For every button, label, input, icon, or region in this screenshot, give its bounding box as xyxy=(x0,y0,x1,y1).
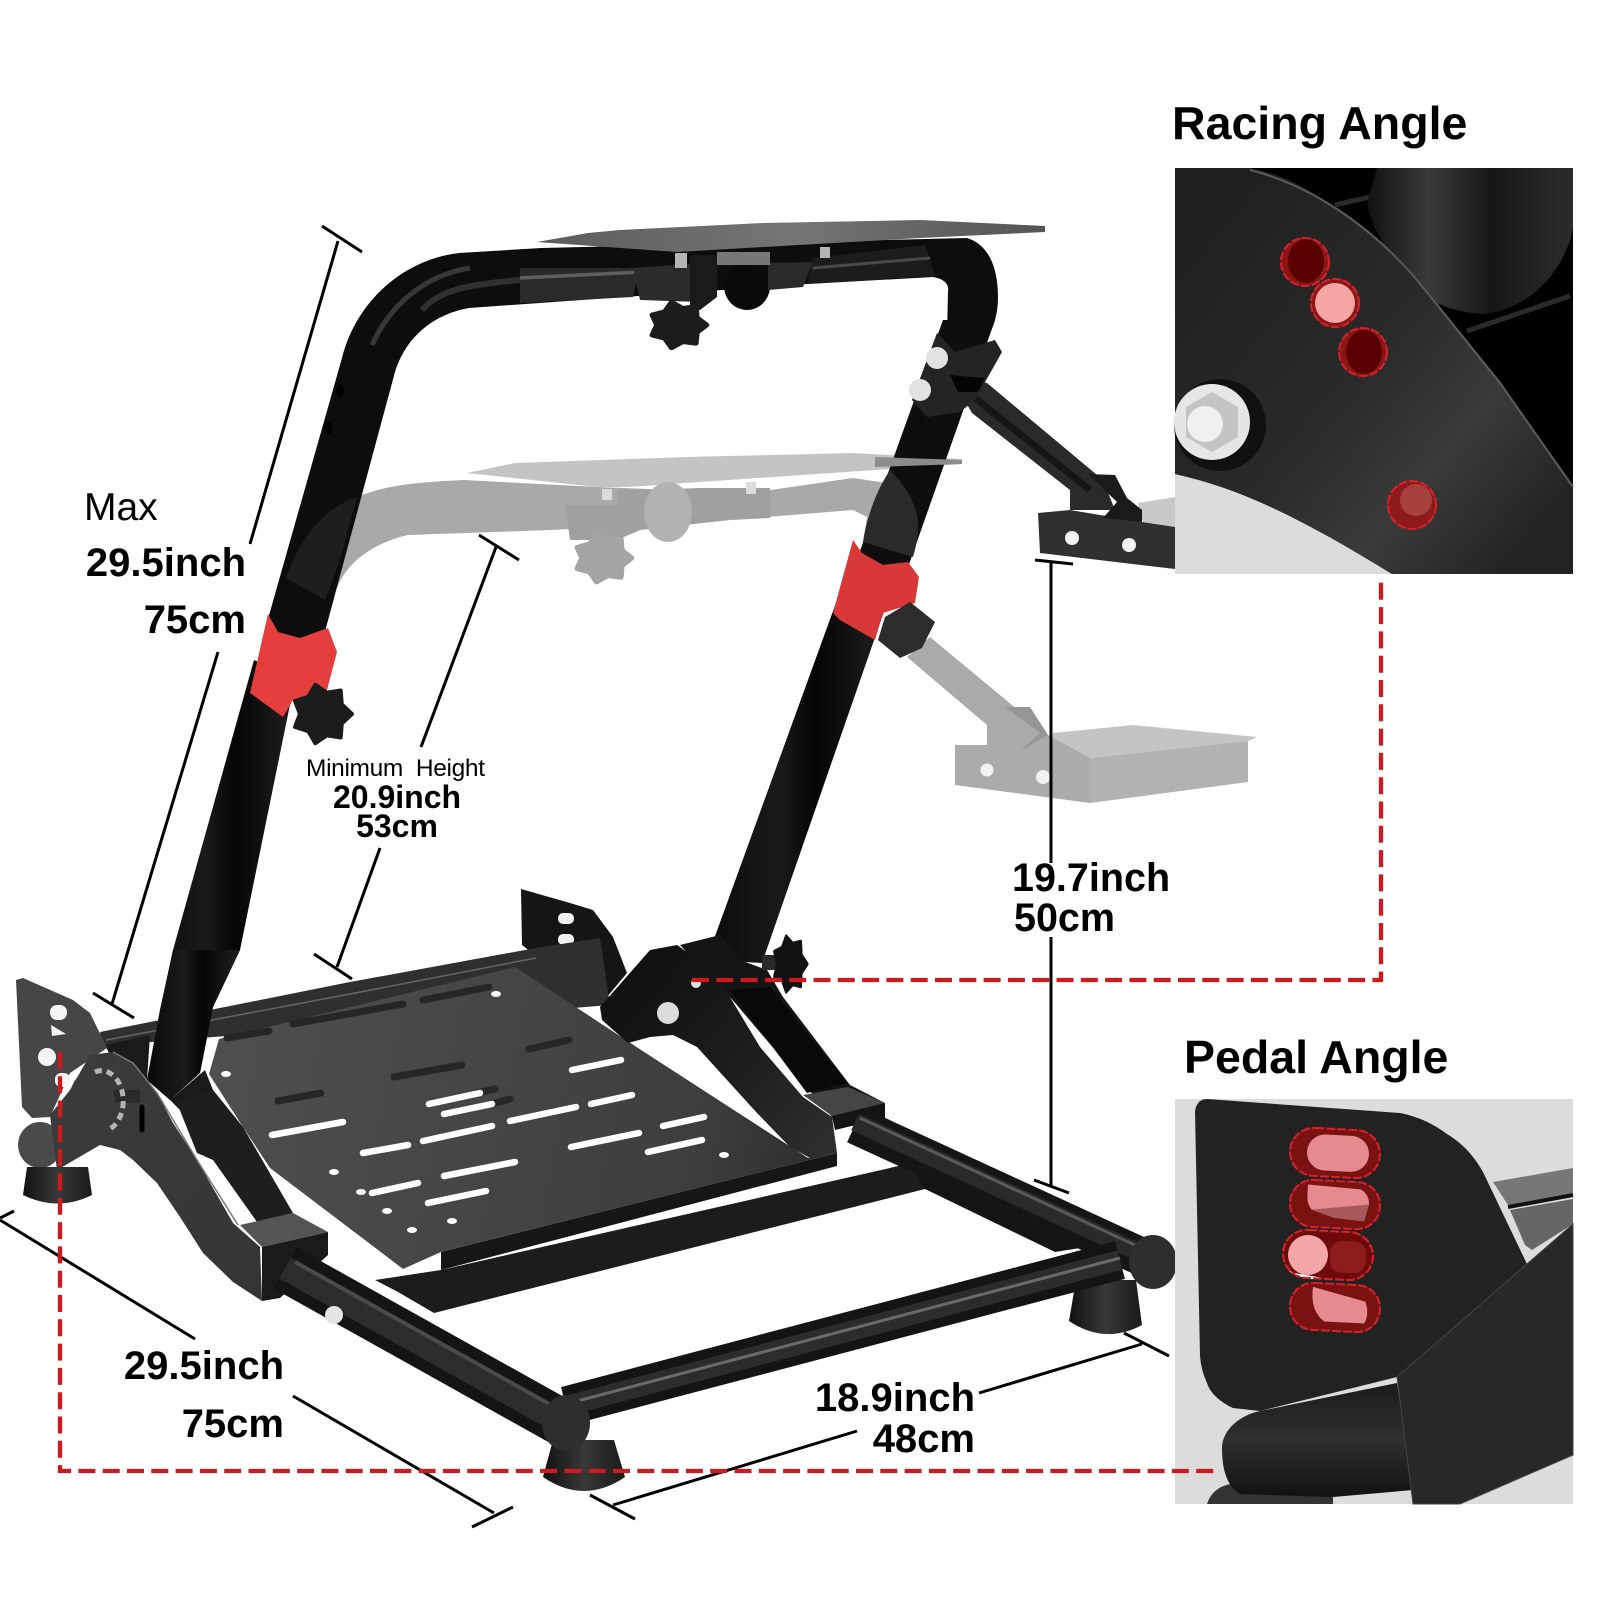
ghost clamp xyxy=(565,488,770,540)
ghost wedge xyxy=(1005,707,1048,751)
ghost arc over left post xyxy=(286,497,357,600)
ghost knob xyxy=(577,534,632,582)
right lower post xyxy=(708,578,888,963)
upper right clamp xyxy=(912,333,1002,417)
left block front xyxy=(262,1232,328,1301)
right block top xyxy=(803,1087,885,1116)
label: minimum height: Minimum Height xyxy=(306,755,485,782)
panel background xyxy=(1175,1099,1573,1504)
left collar knob xyxy=(295,685,352,743)
background struts xyxy=(1335,190,1570,331)
red dashed connector: pedal angle xyxy=(60,1052,1220,1471)
top knob xyxy=(652,302,706,348)
tube section left of clamp xyxy=(520,268,640,303)
pedal bracket front xyxy=(1038,510,1175,569)
ghost plate band across right post xyxy=(875,457,962,467)
clamp grey bar xyxy=(717,252,770,265)
right foot xyxy=(1069,1280,1142,1334)
ghost pedal block top xyxy=(1053,725,1257,758)
right rear inner member xyxy=(680,935,885,1130)
panel: racing angle xyxy=(1174,168,1573,574)
label: max height xyxy=(84,486,246,642)
clamp collars under top plate xyxy=(633,262,717,302)
main stand xyxy=(147,220,1175,1100)
highlighted hole pivot xyxy=(1388,481,1436,529)
ghost bracket front xyxy=(955,735,1090,803)
label: minimum height xyxy=(306,755,485,844)
clamp bolts xyxy=(909,347,948,401)
silver pads xyxy=(675,247,830,268)
side plate xyxy=(1195,1099,1527,1411)
label: arm height xyxy=(1012,856,1170,940)
red collar left xyxy=(250,614,337,717)
ghost clamp roller xyxy=(644,482,692,542)
ghost plate xyxy=(467,453,962,487)
label: base width: 48cm xyxy=(873,1417,975,1461)
ghost: lowered wheel mount position xyxy=(286,453,1257,803)
light background corner xyxy=(1175,474,1392,574)
right rear side plate xyxy=(521,889,627,1003)
label: base width: 18.9inch xyxy=(815,1376,975,1420)
label: minimum height: 20.9inch xyxy=(333,779,461,815)
foot xyxy=(1207,1484,1333,1504)
front triangle plate xyxy=(1397,1224,1573,1504)
right long tube xyxy=(855,1118,1153,1262)
left lower post xyxy=(147,660,295,1100)
right bracket xyxy=(600,945,837,1158)
left long tube xyxy=(285,1262,566,1425)
left base knob xyxy=(69,1070,140,1134)
black side plate xyxy=(1175,168,1573,574)
label: arm height: 19.7inch xyxy=(1012,856,1170,900)
label: base length xyxy=(124,1344,284,1446)
dimension lines xyxy=(0,226,1169,1527)
tube bolt xyxy=(325,1306,343,1324)
ghost arm xyxy=(907,637,1048,760)
label: minimum height: 53cm xyxy=(356,808,438,844)
red dashed connector: racing angle xyxy=(692,578,1381,980)
slot 4 xyxy=(1289,1282,1381,1333)
tube end caps xyxy=(542,1395,590,1451)
front crossbar xyxy=(375,1160,925,1313)
red collar right xyxy=(833,540,919,640)
slot 2 xyxy=(1289,1179,1381,1230)
upper arm beam xyxy=(950,375,1115,510)
plate front flange xyxy=(441,1153,837,1270)
panel: pedal angle xyxy=(1175,1099,1573,1504)
right bracket bolts xyxy=(657,1002,679,1024)
label: base length: 29.5inch xyxy=(124,1344,284,1388)
ghost block side xyxy=(1090,741,1248,803)
front foot xyxy=(543,1440,625,1491)
left ball joint xyxy=(18,1122,62,1168)
arm wedge xyxy=(1088,474,1142,522)
clamp roller xyxy=(724,262,770,310)
label: arm height: 50cm xyxy=(1014,896,1115,940)
right base knob xyxy=(762,936,807,992)
panel background xyxy=(1175,168,1573,574)
highlighted hole top xyxy=(1281,238,1329,286)
left post base in front of rail xyxy=(147,950,240,1100)
slot 1 xyxy=(1289,1127,1381,1179)
hex bolt xyxy=(1174,379,1266,471)
right lower rail xyxy=(880,1120,1130,1252)
heading: pedal angle: Pedal Angle xyxy=(1184,1031,1448,1083)
left bracket xyxy=(50,1052,262,1301)
highlighted hole pin xyxy=(1311,279,1359,327)
label: base length: 75cm xyxy=(182,1402,284,1446)
upper frame tube xyxy=(262,238,998,650)
rear rail lower xyxy=(1510,1199,1573,1250)
label: max height: 75cm xyxy=(144,598,246,642)
slot 3 with bolt xyxy=(1282,1229,1374,1282)
label: max height: 29.5inch xyxy=(86,541,246,585)
heading: racing angle: Racing Angle xyxy=(1172,97,1467,149)
base frame xyxy=(16,889,1177,1491)
front tube xyxy=(566,1258,1120,1406)
dark slots xyxy=(227,987,569,1104)
ghost tube xyxy=(286,478,917,588)
plate holes xyxy=(221,991,729,1233)
back rail xyxy=(100,938,610,1046)
right collar knob xyxy=(878,602,935,658)
holes in left post xyxy=(324,384,344,435)
strut white slit xyxy=(197,1155,250,1225)
label: base width xyxy=(815,1376,975,1461)
left block top xyxy=(240,1213,328,1247)
post foot support xyxy=(170,1070,215,1110)
rear rail top xyxy=(1493,1168,1573,1205)
white slots xyxy=(272,1060,704,1203)
label: max height: Max xyxy=(84,486,158,529)
cylinder xyxy=(1367,168,1573,314)
bracket slot xyxy=(140,1107,144,1130)
rail supports behind post xyxy=(105,1035,150,1080)
top plate xyxy=(537,220,1045,252)
left foot xyxy=(23,1167,92,1204)
left inner strut xyxy=(177,1090,293,1222)
tube bulge xyxy=(1222,1383,1413,1497)
highlighted hole lower xyxy=(1339,328,1387,376)
ghost bend seen through right post xyxy=(863,470,918,557)
left rear side plate xyxy=(16,978,107,1118)
right upper post xyxy=(855,320,995,590)
base plate xyxy=(209,967,837,1269)
pedal plate top xyxy=(1138,497,1175,527)
tube section right of clamp xyxy=(807,245,935,284)
